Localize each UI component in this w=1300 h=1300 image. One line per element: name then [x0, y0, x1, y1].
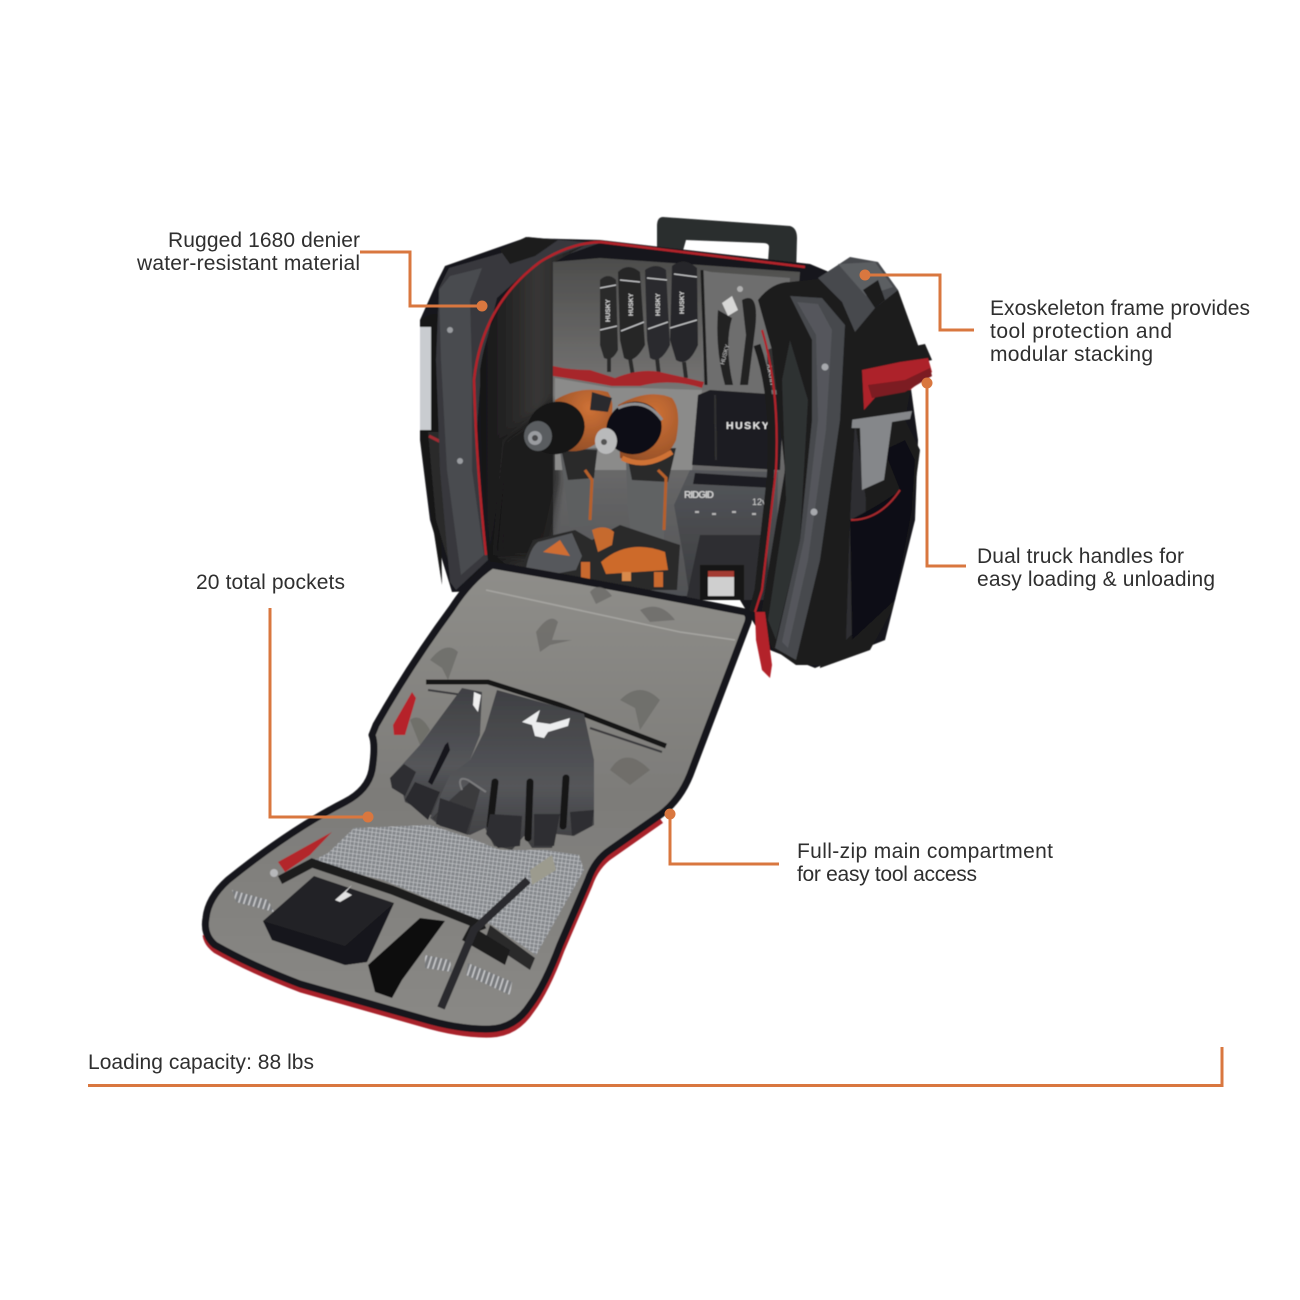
elastic loops: [232, 890, 274, 912]
product photo: open rolling tool backpack: [205, 217, 932, 1034]
loading capacity bracket: [88, 1047, 1222, 1086]
left exoskeleton frame: [436, 237, 600, 590]
handle: [626, 458, 672, 545]
charger: RIDGID: [684, 490, 714, 501]
front zipper pull: [755, 612, 772, 678]
callout leader: pockets: [270, 608, 374, 822]
callout text: exoskeleton frame: Exoskeleton frame provides: [990, 297, 1250, 320]
telescoping handle: [657, 217, 797, 278]
callout text: exoskeleton frame: modular stacking: [990, 343, 1153, 366]
gray frame bar: [775, 296, 845, 660]
open front flap: [205, 565, 749, 1034]
screwdrivers: HUSKY: [655, 293, 662, 316]
callout leader: exoskeleton frame: [860, 270, 974, 330]
body: [555, 390, 612, 451]
pliers plate: [702, 270, 790, 395]
loading capacity text: Loading capacity: 88 lbs: [88, 1051, 314, 1074]
callout leader: truck handles: [922, 378, 966, 566]
callout text: pockets: 20 total pockets: [196, 571, 345, 594]
upper zip pocket: [426, 682, 666, 746]
red zipper tag lower: [278, 832, 332, 872]
black Husky pouch: [692, 390, 784, 470]
callout text: exoskeleton frame: tool protection and: [990, 320, 1172, 343]
batteries: [522, 525, 680, 590]
body: [618, 394, 678, 464]
callout text: truck handles: easy loading & unloading: [977, 568, 1215, 591]
drill driver: [595, 393, 678, 545]
charger: 12v: [752, 497, 767, 507]
fabric logo pattern: [410, 587, 675, 785]
nose: [598, 393, 670, 463]
callout text: water-resistant material: [136, 229, 360, 275]
padded stitching strip: [768, 340, 808, 640]
screwdrivers: HUSKY: [605, 299, 612, 322]
shadow in lower interior: [495, 400, 560, 560]
callout text: exoskeleton frame: [990, 297, 1250, 366]
handle: [560, 448, 598, 528]
callout leader: main compartment: [664, 808, 779, 864]
black tool case: [263, 876, 394, 965]
right exoskeleton frame: [752, 257, 898, 665]
callout text: water-resistant material: water-resistant material: [136, 252, 360, 275]
screwdrivers: [600, 261, 698, 378]
strap with buckle: [441, 855, 556, 1008]
impact driver: [520, 390, 612, 528]
interior door lining: [480, 245, 585, 600]
callout text: main compartment: [797, 840, 1053, 886]
upper flap pocket seam: [486, 590, 735, 640]
right glove: [430, 690, 594, 850]
pliers plate: HUSKY: [768, 364, 774, 385]
gray tab holder on side: [850, 411, 912, 490]
screwdrivers: HUSKY: [679, 291, 686, 314]
left glove: [390, 688, 482, 818]
top corner cap: [818, 257, 898, 332]
callout text: truck handles: [977, 545, 1215, 591]
mesh pocket binding: [280, 863, 482, 930]
red flap edge: [206, 820, 661, 1034]
callout text: main compartment: for easy tool access: [797, 863, 977, 886]
callout text: water-resistant material: Rugged 1680 denier: [168, 229, 360, 252]
screwdrivers: HUSKY: [628, 293, 635, 316]
callout text: truck handles: Dual truck handles for: [977, 545, 1184, 568]
red main zipper: [474, 242, 805, 555]
red elastic tool loops: [553, 366, 704, 470]
charger: [674, 470, 778, 600]
truck handle in red: [862, 344, 932, 410]
glove logo: [522, 710, 570, 738]
black Husky pouch: HUSKY.: [726, 420, 772, 432]
right side body with pocket: [820, 270, 920, 668]
nose: [520, 394, 592, 462]
folded black pliers: [368, 918, 445, 998]
callout leader: water-resistant material: [360, 252, 488, 312]
main bag back body: [420, 238, 918, 668]
red zipper pull tag: [393, 692, 416, 735]
flap lining with black binding: [205, 565, 749, 1029]
callout text: main compartment: Full-zip main compartment: [797, 840, 1053, 863]
pliers plate: HUSKY: [720, 344, 731, 366]
mesh pocket: [310, 825, 584, 955]
left side pocket with silver tab: [420, 314, 448, 585]
interior gray tool panel: [553, 258, 800, 600]
gloves: [390, 688, 594, 850]
